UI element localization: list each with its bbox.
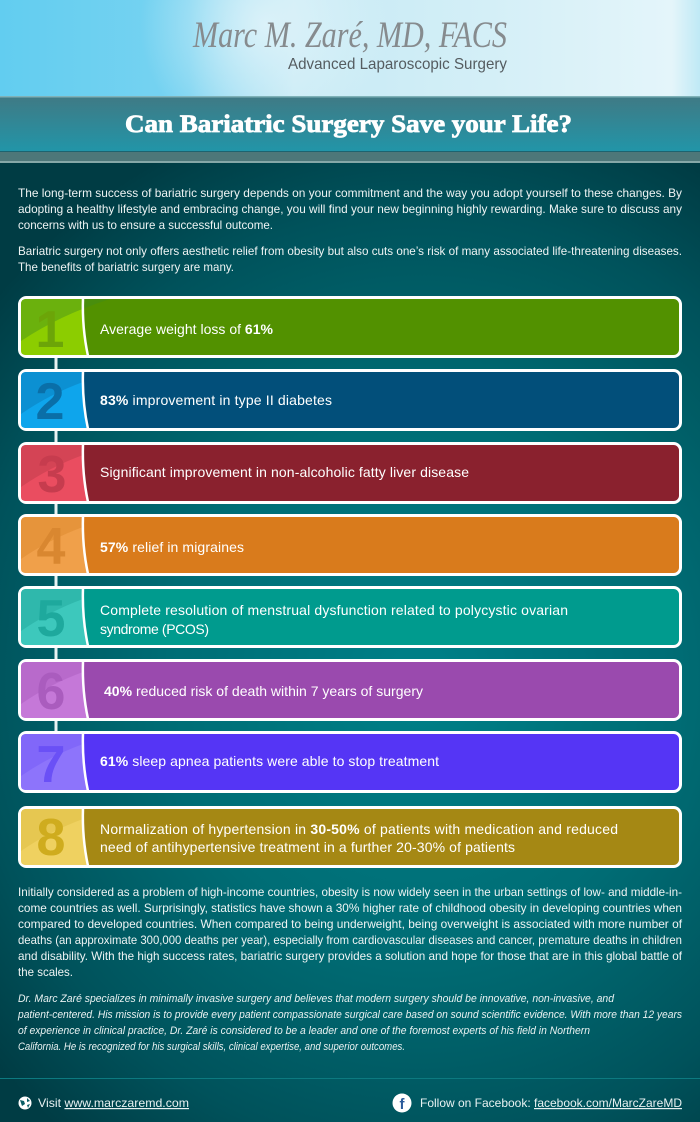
benefit 3: [20, 444, 680, 504]
closing paragraph: compared to developed countries. When compared to being underweight, being overweight is associated with more number of: [18, 918, 683, 931]
connector line: [54, 350, 58, 750]
benefit 5: Complete resolution of menstrual dysfunction related to polycystic ovarian: [100, 602, 568, 618]
benefit 4: [20, 516, 680, 576]
closing paragraph: and disability. With the high success rates, bariatric surgery provides a solution and hope for those that are in this global battle of: [18, 950, 683, 963]
closing paragraph: the scales.: [18, 966, 73, 979]
benefit 8: need of antihypertensive treatment in a further 20-30% of patients: [100, 839, 515, 855]
number: 8: [37, 809, 65, 867]
number: 7: [37, 736, 65, 794]
benefit 8: Normalization of hypertension in 30-50% of patients with medication and reduced: [100, 821, 618, 837]
icon: facebook: [392, 1094, 412, 1113]
benefit 8: [20, 808, 680, 867]
icon: facebook: f: [400, 1096, 406, 1113]
footer facebook link: [392, 1094, 682, 1113]
logo tagline: Advanced Laparoscopic Surgery: [288, 56, 507, 73]
number: 6: [37, 663, 65, 721]
benefit 6: 40% reduced risk of death within 7 years of surgery: [104, 683, 423, 699]
number: 4: [37, 518, 66, 576]
benefit 5: syndrome (PCOS): [100, 621, 209, 637]
benefit 1: Average weight loss of 61%: [100, 321, 274, 337]
number: 3: [38, 446, 66, 504]
intro text: [18, 187, 682, 274]
intro text: The long-term success of bariatric surgery depends on your commitment and the way you adopt yourself to these changes. By: [18, 187, 682, 200]
intro text: adopting a healthy lifestyle and embracing change, you will find your new beginning highly rewarding. Make sure to discuss any: [18, 203, 682, 216]
header band: [0, 0, 700, 97]
closing paragraph: Initially considered as a problem of high-income countries, obesity is now widely seen in the urban settings of low- and middle-in-: [18, 886, 682, 899]
doctor biography: California. He is recognized for his surgical skills, clinical expertise, and superior outcomes.: [18, 1041, 405, 1053]
benefit 7: [20, 732, 680, 794]
doctor biography: [17, 993, 683, 1053]
closing paragraph: come countries as well. Surprisingly, statistics have shown a 30% higher rate of childhood obesity in developing countries when: [18, 902, 682, 915]
title banner: [0, 96, 700, 163]
icon: globe: [18, 1096, 32, 1110]
intro text: The benefits of bariatric surgery are many.: [18, 261, 234, 274]
benefit 4: 57% relief in migraines: [100, 539, 244, 555]
doctor biography: Dr. Marc Zaré specializes in minimally invasive surgery and believes that modern surgery should be innovative, non-invasive, and: [18, 993, 615, 1005]
benefit 2: 83% improvement in type II diabetes: [100, 392, 332, 408]
benefit 3: Significant improvement in non-alcoholic fatty liver disease: [100, 464, 469, 480]
title: Can Bariatric Surgery Save your Life?: [125, 111, 572, 138]
benefit 2: [20, 370, 680, 431]
benefit 6: [20, 660, 680, 721]
footer divider: [0, 1078, 700, 1079]
number: 1: [36, 301, 64, 359]
footer website link: Visit www.marczaremd.com: [38, 1096, 189, 1110]
number: 5: [37, 590, 65, 648]
intro text: concerns with us to ensure a successful outcome.: [18, 219, 273, 232]
benefit 5: [20, 588, 680, 648]
closing paragraph: deaths (an approximate 300,000 deaths per year), especially from cardiovascular diseases and cancer, premature deaths in children: [18, 934, 682, 947]
logo signature: Marc M. Zaré, MD, FACS: [192, 15, 507, 56]
benefit 7: 61% sleep apnea patients were able to stop treatment: [100, 753, 439, 769]
doctor biography: of experience in clinical practice, Dr. Zaré is considered to be a leader and one of the foremost experts of his field in Northern: [18, 1025, 590, 1037]
intro text: Bariatric surgery not only offers aesthetic relief from obesity but also cuts one’s risk of many associated life-threatening diseases.: [18, 245, 682, 258]
closing paragraph: [18, 886, 683, 979]
doctor biography: patient-centered. His mission is to provide every patient compassionate surgical care based on sound scientific evidence. With more than 12 years: [17, 1009, 683, 1021]
benefit 1: [20, 298, 680, 359]
number: 2: [36, 373, 64, 431]
footer facebook link: Follow on Facebook: facebook.com/MarcZareMD: [420, 1096, 682, 1110]
